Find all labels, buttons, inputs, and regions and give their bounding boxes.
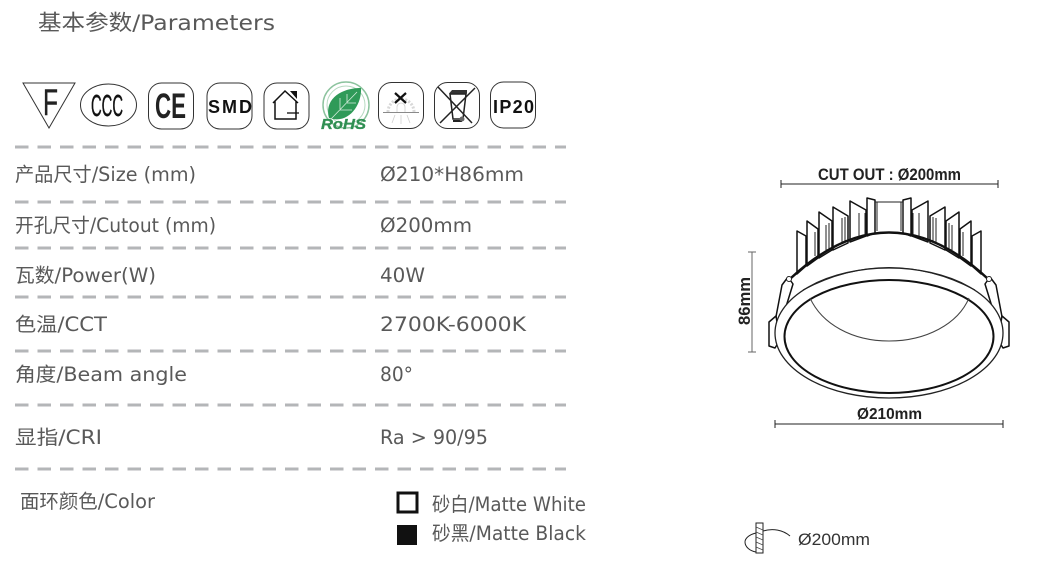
- title: 基本参数/Parameters: [38, 11, 275, 36]
- row: beam angle: [15, 363, 413, 386]
- dashed dividers: [15, 147, 566, 469]
- icon: CCC mark: [80, 84, 136, 126]
- cut out dimension: CUT OUT : Ø200mm: [818, 165, 961, 184]
- icon: IP20: [490, 82, 536, 128]
- icon: CCC mark: CCC: [91, 88, 123, 123]
- downlight fins right: [903, 198, 981, 274]
- row: CRI: 显指/CRI: [15, 426, 102, 449]
- product dimension drawing: [735, 165, 1009, 428]
- icon: indoor house: [264, 83, 309, 129]
- icon: RoHS leaf: RoHS: [321, 116, 366, 133]
- row: power: 40W: [380, 264, 425, 287]
- body top arc: [791, 232, 987, 278]
- row: size: [15, 163, 524, 186]
- ring top highlights: [803, 268, 975, 290]
- icon: F mark triangle: F: [43, 82, 58, 123]
- icon: CE mark: [148, 83, 194, 129]
- icon: F mark triangle: [23, 82, 75, 128]
- right spring clip: [985, 276, 1009, 348]
- row: size: Ø210*H86mm: [380, 163, 524, 186]
- cut out dimension: [781, 165, 998, 188]
- row: color label: 面环颜色/Color: [20, 490, 156, 513]
- diameter dimension: Ø210mm: [857, 406, 922, 423]
- icon: CE mark: CE: [155, 87, 186, 126]
- color option: matte black: 砂黑/Matte Black: [432, 522, 587, 545]
- row: cutout: [15, 214, 472, 237]
- diameter dimension: [775, 406, 1003, 428]
- parameter table: [15, 163, 587, 545]
- icon: no cover insulation: [378, 82, 424, 128]
- row: cutout: 开孔尺寸/Cutout (mm): [15, 214, 216, 237]
- icon: RoHS leaf: [321, 82, 369, 133]
- row: beam angle: 角度/Beam angle: [15, 363, 187, 386]
- icon: SMD: [207, 83, 252, 129]
- color option: matte white: 砂白/Matte White: [432, 493, 586, 516]
- certification icon row: [23, 82, 536, 133]
- cutout hole note: [745, 523, 870, 553]
- row: CRI: Ra > 90/95: [380, 426, 488, 449]
- reflector curve: [810, 298, 969, 341]
- left spring clip: [769, 276, 793, 348]
- row: power: [15, 264, 425, 287]
- row: CRI: [15, 426, 488, 449]
- row: CCT: 2700K-6000K: [380, 313, 527, 336]
- row: CCT: [15, 313, 527, 336]
- cutout label: Ø200mm: [798, 530, 870, 549]
- row: beam angle: 80°: [380, 363, 413, 386]
- outer ring: [775, 268, 1003, 398]
- row: power: 瓦数/Power(W): [15, 264, 156, 287]
- row: CCT: 色温/CCT: [15, 313, 107, 336]
- icon: SMD: SMD: [208, 97, 252, 117]
- icon: ceiling hole saw: [745, 523, 790, 553]
- icon: crossed-out recycle bin: [434, 82, 480, 128]
- inner aperture: [784, 280, 994, 393]
- icon: IP20: IP20: [493, 97, 534, 117]
- row: size: 产品尺寸/Size (mm): [15, 163, 196, 186]
- height dimension: [735, 252, 756, 352]
- downlight fins left: [797, 198, 875, 274]
- row: cutout: Ø200mm: [380, 214, 472, 237]
- height dimension: 86mm: [735, 277, 754, 325]
- center fin block: [875, 202, 903, 231]
